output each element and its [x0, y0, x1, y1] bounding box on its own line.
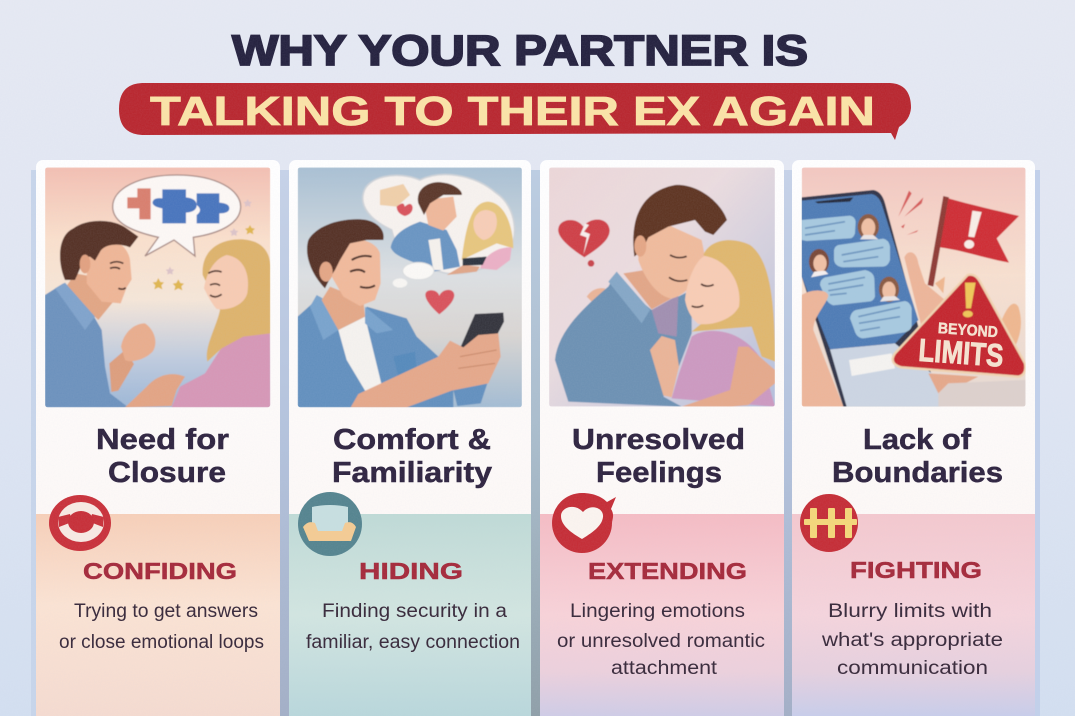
warning sign text — [919, 322, 1003, 367]
illustration: couple embracing — [549, 167, 775, 407]
description: Blurry limits with — [828, 601, 992, 622]
description — [306, 601, 520, 653]
warning sign text: BEYOND — [937, 320, 998, 341]
title banner: TALKING TO THEIR EX AGAIN — [150, 88, 875, 134]
heading: Boundaries — [832, 457, 1003, 489]
description: Finding security in a — [322, 601, 507, 622]
panel: need for closure — [36, 160, 280, 716]
illustration: man on phone imagining ex — [298, 167, 522, 407]
subheading: CONFIDING — [83, 558, 237, 584]
icon: life ring — [49, 495, 111, 551]
panel: unresolved feelings — [540, 160, 784, 716]
panel lower tint — [540, 514, 784, 716]
panel lower tint — [36, 514, 280, 716]
subheading: HIDING — [359, 558, 463, 584]
icon: heart speech bubble — [552, 493, 616, 553]
heading: Feelings — [596, 457, 722, 489]
description: attachment — [611, 658, 718, 679]
description: familiar, easy connection — [306, 632, 520, 653]
heading — [332, 424, 492, 489]
description: what's appropriate — [821, 630, 1003, 651]
panel lower tint — [792, 514, 1035, 716]
title: WHY YOUR PARTNER IS — [232, 27, 808, 75]
heading — [572, 424, 745, 489]
panel: lack of boundaries — [792, 160, 1035, 716]
icon: couch — [298, 492, 362, 556]
description — [821, 601, 1003, 679]
panel lower tint — [289, 514, 531, 716]
illustration: phone chat and warning signs — [802, 167, 1026, 407]
icon: fence — [800, 494, 858, 552]
heading: Need for — [96, 424, 229, 456]
description: Lingering emotions — [570, 601, 745, 622]
description — [59, 601, 264, 653]
subheading: EXTENDING — [588, 558, 747, 584]
subheading: FIGHTING — [850, 557, 982, 583]
heading: Familiarity — [332, 457, 492, 489]
heading — [832, 424, 1003, 489]
heading: Comfort & — [333, 424, 491, 456]
heading: Closure — [108, 457, 226, 489]
heading: Unresolved — [572, 424, 745, 456]
panel: comfort and familiarity — [289, 160, 531, 716]
description — [557, 601, 765, 679]
heading: Lack of — [863, 424, 971, 456]
description: Trying to get answers — [74, 601, 258, 622]
heading — [96, 424, 229, 489]
description: communication — [837, 658, 988, 679]
description: or unresolved romantic — [557, 631, 765, 652]
title banner — [119, 83, 911, 140]
warning sign text: LIMITS — [917, 332, 1005, 374]
illustration: couple seeking closure — [45, 167, 270, 407]
description: or close emotional loops — [59, 632, 264, 653]
